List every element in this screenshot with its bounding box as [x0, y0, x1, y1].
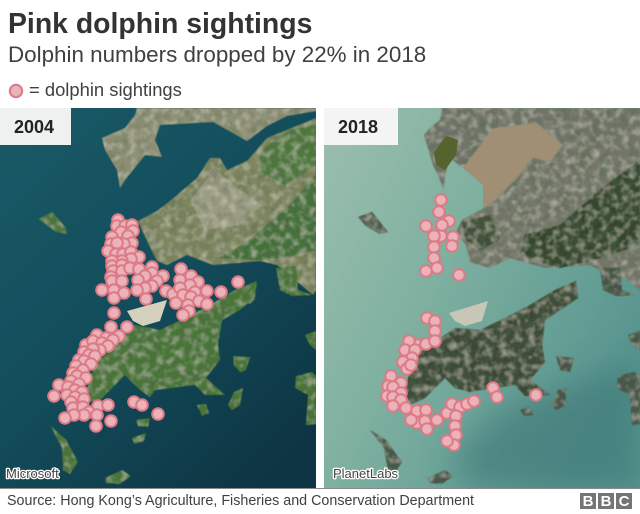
2004 small islands — [38, 212, 316, 484]
2018 muddy bay — [463, 123, 563, 208]
2018 land: Shekou hill — [434, 136, 458, 170]
subtitle: Dolphin numbers dropped by 22% in 2018 — [8, 42, 426, 67]
legend: = dolphin sightings — [29, 79, 182, 100]
2004 land: green hills — [220, 175, 316, 260]
source: Source: Hong Kong’s Agriculture, Fisheries and Conservation Department — [7, 493, 474, 509]
2004 label: 2004 — [14, 117, 54, 137]
2004 dolphin sightings — [48, 214, 244, 432]
2004 label — [0, 108, 71, 145]
BBC logo: C — [619, 493, 630, 510]
2018 land: dark hills — [520, 160, 640, 268]
2018 label — [324, 108, 398, 145]
BBC logo: B — [601, 493, 612, 510]
2018 airport — [449, 301, 488, 326]
2004 land: peninsula — [138, 118, 316, 295]
2018 dolphin sightings — [381, 194, 542, 451]
2018 land: northern mainland — [424, 108, 640, 190]
BBC logo — [580, 493, 632, 510]
panel: 2004 map — [0, 108, 316, 488]
panel: 2018 map — [324, 108, 640, 488]
title: Pink dolphin sightings — [8, 8, 312, 40]
2004 land: northern mainland — [102, 108, 316, 188]
credit: Microsoft: Microsoft — [6, 466, 59, 481]
2018 label: 2018 — [338, 117, 378, 137]
credit: PlanetLabs: PlanetLabs — [333, 466, 399, 481]
2018 water tone: darker south-east — [450, 360, 640, 488]
2004 land: urban area — [190, 170, 262, 230]
2018 small islands — [358, 212, 640, 484]
BBC logo: B — [583, 493, 594, 510]
2018 land: Lantau island — [405, 281, 578, 404]
2018 land: peninsula — [456, 145, 640, 290]
2004 airport — [127, 300, 167, 326]
2004 land: Lantau island — [85, 281, 257, 402]
